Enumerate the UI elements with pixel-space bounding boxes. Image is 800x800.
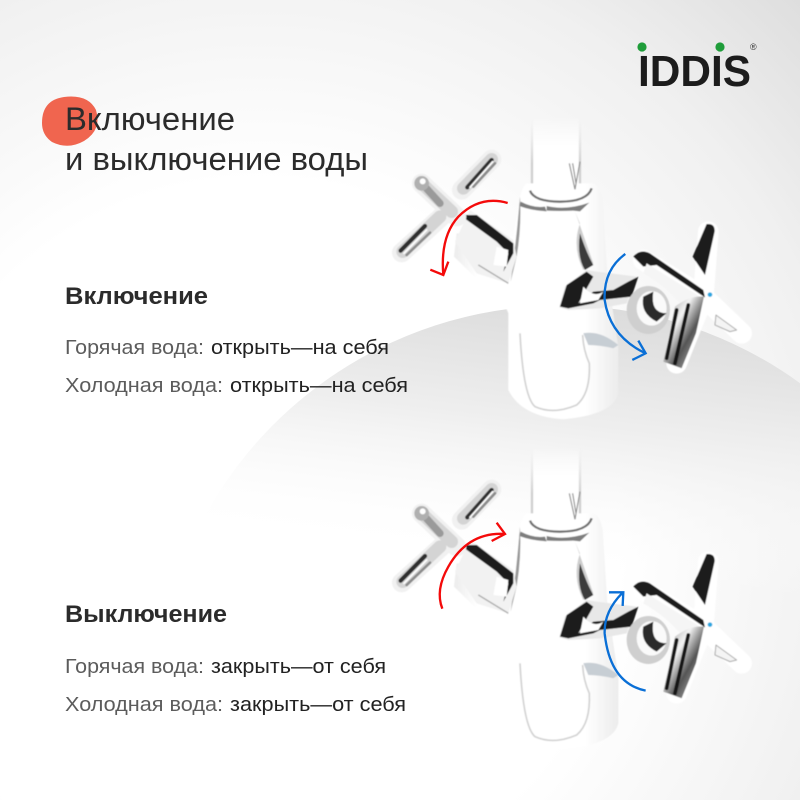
text: on instructions: открыть—на себя	[211, 337, 389, 359]
heading: off: Выключение	[65, 601, 227, 628]
text: on instructions: открыть—на себя	[230, 375, 408, 397]
faucet: turning off	[401, 447, 742, 749]
text: on instructions: Горячая вода:	[65, 337, 204, 359]
text: off instructions	[65, 656, 406, 716]
heading: on: Включение	[65, 283, 208, 310]
text: off instructions: закрыть—от себя	[211, 656, 386, 678]
faucet: turning on	[401, 117, 742, 419]
blue arrow: cold off	[605, 592, 646, 691]
blue arrow: cold on	[605, 254, 646, 360]
red arrow: hot on	[430, 201, 508, 275]
coral accent blob	[42, 97, 98, 146]
red arrow: hot off	[440, 523, 505, 609]
logo: IDDIS: ®	[750, 42, 757, 52]
title: Включение	[65, 101, 235, 137]
text: off instructions: закрыть—от себя	[230, 694, 406, 716]
title	[65, 101, 368, 177]
text: on instructions	[65, 337, 408, 397]
logo: IDDIS: IDDIS	[638, 47, 751, 96]
text: on instructions: Холодная вода:	[65, 375, 223, 397]
title: и выключение воды	[65, 141, 368, 177]
text: off instructions: Горячая вода:	[65, 656, 204, 678]
text: off instructions: Холодная вода:	[65, 694, 223, 716]
background arc	[154, 305, 800, 800]
